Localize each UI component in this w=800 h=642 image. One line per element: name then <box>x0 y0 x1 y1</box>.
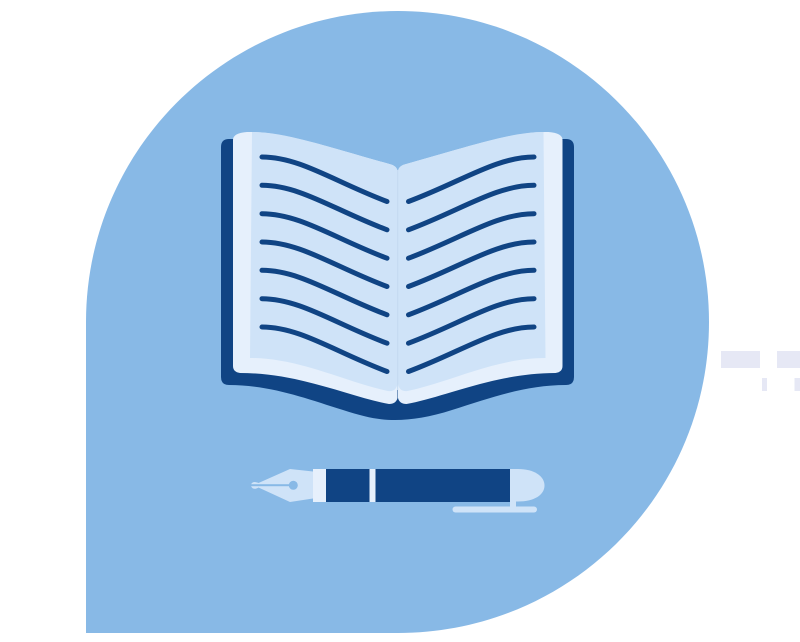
icon: fountain pen <box>251 469 544 512</box>
pen clip <box>452 501 537 512</box>
pen barrel <box>326 469 510 502</box>
book cover <box>221 139 574 420</box>
right page inner sheet <box>398 132 546 391</box>
pen band <box>370 469 376 502</box>
left page <box>233 132 398 404</box>
right page outer sheet <box>398 132 562 404</box>
left page text lines <box>262 157 387 372</box>
left page outer sheet <box>233 132 398 404</box>
nib slit and hole <box>251 481 298 490</box>
pen collar <box>313 469 326 502</box>
decorative blocks at right edge <box>721 351 800 391</box>
pen cap end <box>510 469 544 502</box>
right page <box>398 132 562 404</box>
pen nib <box>251 469 313 502</box>
left page inner sheet <box>250 132 398 391</box>
background teardrop shape <box>86 11 709 633</box>
book spine crease <box>397 170 399 390</box>
right page text lines <box>408 157 534 372</box>
icon: open book <box>221 132 574 420</box>
